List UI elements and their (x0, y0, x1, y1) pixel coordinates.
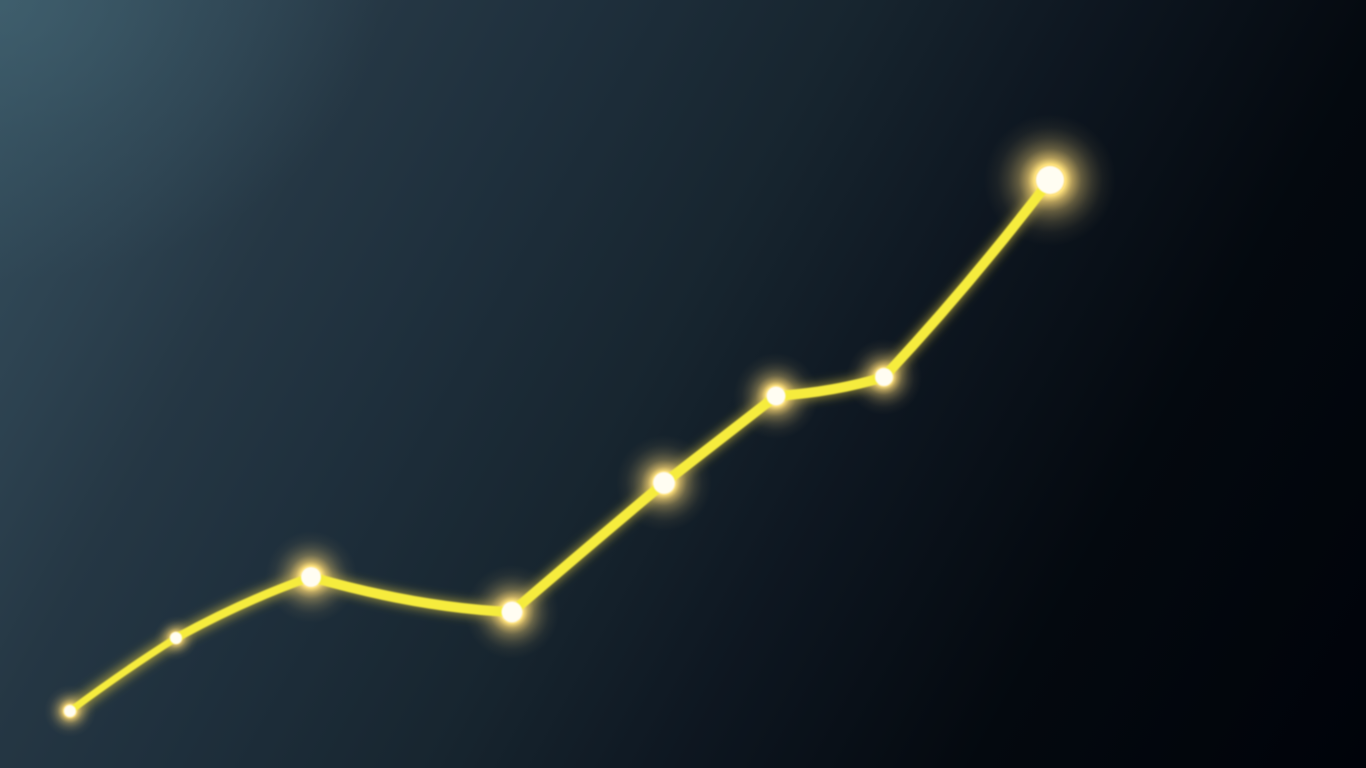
data points (64, 166, 1064, 717)
yellow trend line (70, 180, 1050, 711)
point glows (44, 114, 1116, 737)
line glow (70, 180, 1050, 711)
